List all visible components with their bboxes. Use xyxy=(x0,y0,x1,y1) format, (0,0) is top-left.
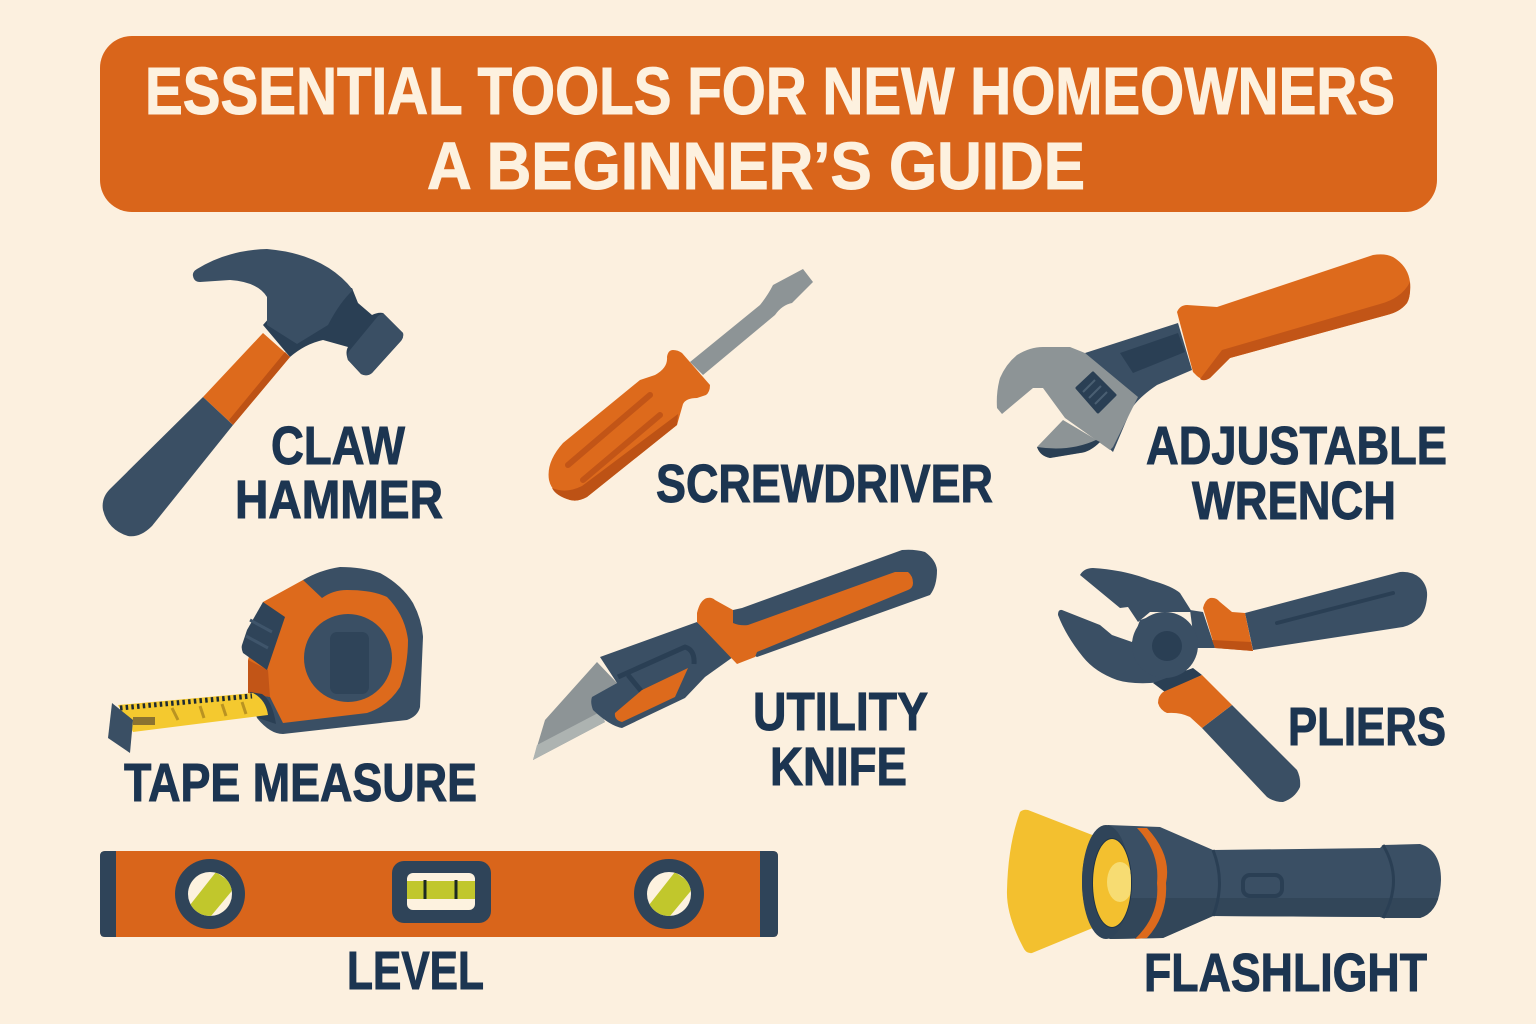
pliers upper jaw xyxy=(1080,568,1192,622)
flashlight barrel rings xyxy=(1213,845,1394,918)
tool: pliers xyxy=(1058,568,1427,802)
tape blade xyxy=(118,693,268,732)
label: utility knife: UTILITY xyxy=(753,682,928,742)
label: adjustable wrench: ADJUSTABLE xyxy=(1146,416,1447,476)
pliers lower handle xyxy=(1202,705,1300,802)
screwdriver handle shadow xyxy=(552,414,678,501)
knife body xyxy=(591,622,733,728)
title banner xyxy=(100,36,1437,212)
wrench shaft slot xyxy=(1120,333,1185,373)
center vial xyxy=(392,861,491,923)
screwdriver handle xyxy=(549,350,710,501)
level end caps xyxy=(100,851,116,937)
knife slot orange xyxy=(615,668,688,722)
wrench head xyxy=(997,347,1138,450)
screwdriver shaft and tip xyxy=(690,269,813,375)
screwdriver handle grooves xyxy=(568,395,660,480)
tool: screwdriver xyxy=(549,269,813,501)
right vial xyxy=(634,859,704,929)
tape marks xyxy=(172,702,246,720)
label: adjustable wrench xyxy=(1146,416,1447,531)
tool: claw hammer xyxy=(103,249,403,536)
pliers upper orange collar xyxy=(1203,598,1253,651)
wrench handle shadow xyxy=(1200,282,1410,380)
left vial xyxy=(175,859,245,929)
wrench lower jaw xyxy=(1037,420,1100,458)
pliers handle groove xyxy=(1277,593,1393,623)
wrench shaft xyxy=(1085,323,1192,452)
hammer head and claw xyxy=(193,249,353,344)
light beam xyxy=(1007,810,1100,953)
label: claw hammer xyxy=(235,416,443,530)
pliers upper neck xyxy=(1190,610,1215,648)
flashlight switch xyxy=(1243,875,1282,896)
tool: adjustable wrench xyxy=(997,254,1410,458)
flashlight lens xyxy=(1092,838,1133,928)
label: utility knife xyxy=(753,682,928,797)
hammer poll face xyxy=(347,313,403,375)
tool: tape measure xyxy=(108,567,423,753)
tape ticks xyxy=(120,696,252,708)
tape mouth xyxy=(250,692,276,724)
wrench knob ridges xyxy=(1083,380,1107,404)
title banner: A BEGINNER’S GUIDE xyxy=(427,129,1085,204)
tape dial xyxy=(304,614,392,702)
label: flashlight: FLASHLIGHT xyxy=(1144,943,1427,1003)
tape case orange xyxy=(248,580,408,723)
label: pliers: PLIERS xyxy=(1288,697,1446,757)
tape case outer xyxy=(250,567,423,734)
pliers upper handle xyxy=(1245,572,1427,650)
tool: level xyxy=(100,851,778,937)
tape grip xyxy=(242,602,285,670)
flashlight body xyxy=(1082,825,1441,939)
label: tape measure: TAPE MEASURE xyxy=(124,753,477,813)
label: screwdriver: SCREWDRIVER xyxy=(656,454,993,514)
knife blade xyxy=(533,662,617,760)
pliers lower jaw xyxy=(1058,610,1190,683)
knife orange grip xyxy=(697,572,913,664)
pliers pivot xyxy=(1132,612,1198,678)
wrench orange handle xyxy=(1177,254,1410,380)
tape end hook xyxy=(108,703,133,753)
label: claw hammer: CLAW xyxy=(271,416,405,476)
knife upper handle xyxy=(720,550,937,657)
pliers lower orange collar xyxy=(1158,675,1232,728)
pliers lower neck xyxy=(1153,668,1202,692)
flashlight orange ring xyxy=(1135,828,1167,939)
hammer neck and poll xyxy=(263,288,403,375)
tool: flashlight xyxy=(1007,810,1442,953)
label: adjustable wrench: WRENCH xyxy=(1192,471,1396,531)
level body xyxy=(100,851,778,937)
tape dial window xyxy=(330,632,369,694)
knife slot outline xyxy=(618,647,694,692)
label: claw hammer: HAMMER xyxy=(235,470,443,530)
label: utility knife: KNIFE xyxy=(770,737,907,797)
label: level: LEVEL xyxy=(347,941,484,1001)
flashlight lower shade xyxy=(1083,898,1438,939)
wrench adjusting knob xyxy=(1077,373,1115,412)
hammer grip xyxy=(103,397,233,536)
hammer handle orange section xyxy=(203,333,290,425)
tape case lower shade xyxy=(248,660,270,697)
tape slider xyxy=(133,717,155,725)
tool: utility knife xyxy=(533,550,937,760)
flashlight head face xyxy=(1082,825,1130,939)
